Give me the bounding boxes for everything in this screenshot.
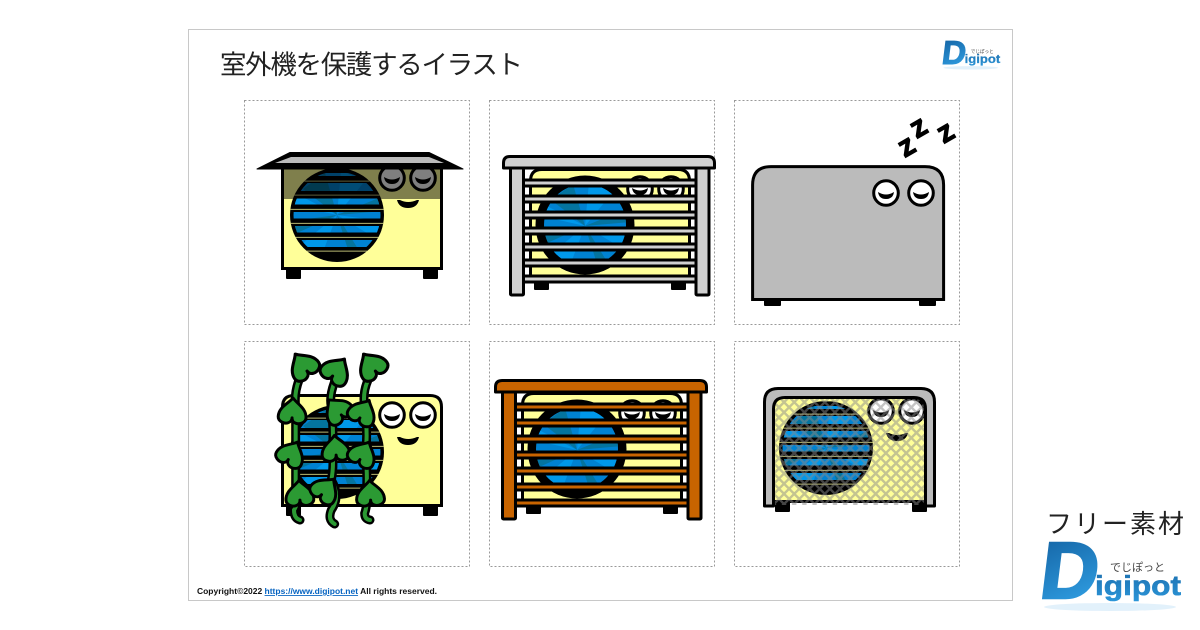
frame: [188, 30, 1012, 600]
air conditioner unit: [522, 394, 682, 514]
ivy vines: [273, 346, 391, 524]
copyright line: Copyright©2022 https://www.digipot.net All rights reserved.: [197, 586, 437, 596]
roof: [257, 152, 463, 169]
logo: small Digipot: [940, 35, 1000, 72]
air conditioner unit: [772, 392, 930, 512]
air conditioner unit: [530, 170, 690, 290]
sleeping Z marks: Z: [895, 133, 919, 162]
title: 室外機を保護するイラスト: [220, 50, 523, 80]
panel: ivy cover: [244, 342, 470, 566]
roof shadow: [281, 168, 443, 199]
free material label: フリー素材: [1046, 509, 1184, 539]
net overlay: [774, 398, 926, 505]
logo: large Digipot: [1036, 526, 1181, 616]
cover body: [753, 167, 944, 306]
sleeping Z marks: Z: [934, 119, 958, 148]
logo: small Digipot: D: [940, 35, 968, 72]
air conditioner unit: [282, 158, 442, 279]
logo: large Digipot: でじぽっと: [1110, 561, 1165, 574]
panel: net cover: [734, 342, 960, 566]
panel: roof cover: [244, 100, 470, 324]
panel: sleeping covered unit: [734, 100, 960, 324]
logo: small Digipot: でじぽっと: [971, 48, 994, 55]
sleeping Z marks: [895, 114, 958, 162]
logo: large Digipot: igipot: [1095, 570, 1181, 601]
air conditioner unit: [282, 396, 442, 516]
sleeping Z marks: Z: [907, 114, 931, 143]
logo: small Digipot: igipot: [965, 53, 1000, 66]
panel: wooden louver cover: [490, 342, 714, 566]
louver cover: [504, 156, 714, 295]
panel: gray louver cover: [490, 100, 714, 324]
logo: large Digipot: D: [1036, 526, 1105, 616]
gray hood: [764, 388, 934, 506]
wooden louver cover: [496, 380, 706, 519]
